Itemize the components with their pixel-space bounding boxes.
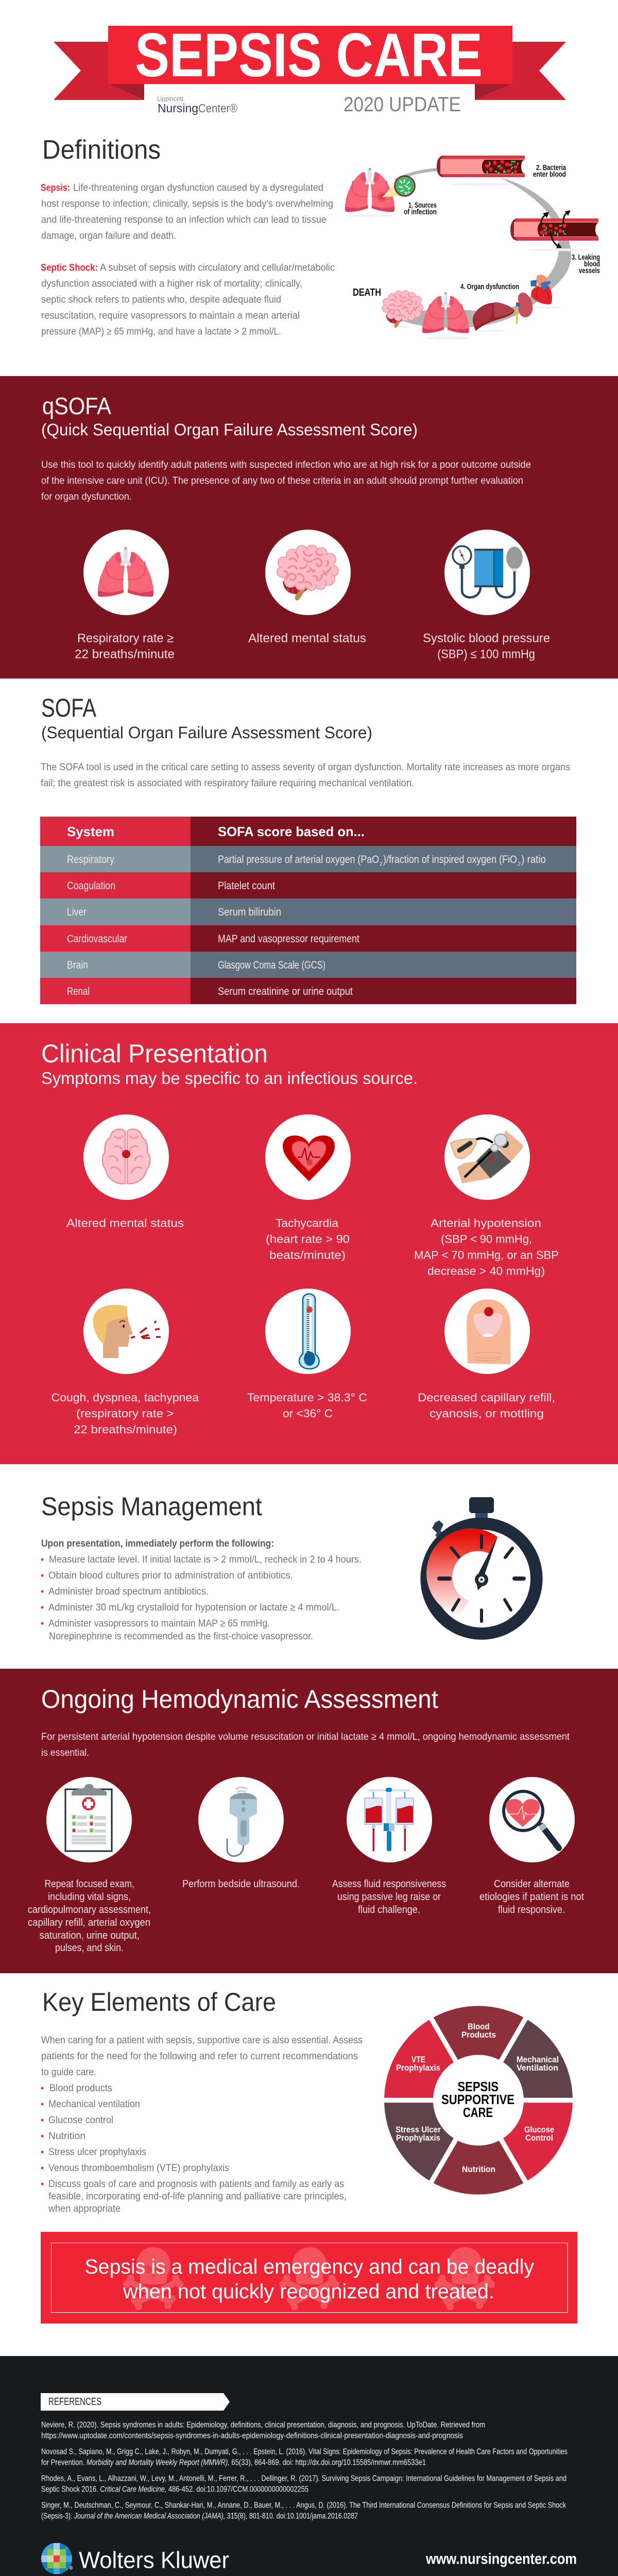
icon: blood pressure measurement	[444, 1114, 530, 1200]
caption: alternate etiologies: Consider alternate	[494, 1878, 570, 1890]
caption: arterial hypotension: Arterial hypotension	[431, 1217, 541, 1229]
logo: Wolters Kluwer: Wolters Kluwer	[79, 2547, 229, 2573]
text block: supportive care intro	[41, 2035, 363, 2078]
caption: alternate etiologies	[479, 1878, 584, 1916]
caption: repeat focused exam: saturation, urine output,	[39, 1930, 140, 1941]
list: care elements: Glucose control	[48, 2114, 113, 2126]
text block: septic shock definition: dysfunction associated with a higher risk of mortality; clinically,	[41, 278, 302, 290]
label: leaking blood vessels	[572, 253, 600, 275]
table: SOFA systems: MAP and vasopressor requirement	[218, 933, 359, 945]
icon: heart	[530, 275, 552, 304]
chart: sepsis supportive care wheel: VTE	[411, 2055, 425, 2064]
text block: sepsis definition: Sepsis:	[41, 182, 70, 194]
label: bacteria enter blood: enter blood	[533, 171, 566, 179]
caption: repeat focused exam: Repeat focused exam,	[44, 1878, 134, 1890]
icon: heart with pulse	[265, 1114, 351, 1200]
text block: qSOFA description: of the intensive care unit (ICU). The presence of any two of these criteria in an adult should prompt further evaluation	[41, 475, 523, 486]
icon: failing brain	[382, 291, 423, 328]
text block: septic shock definition: A subset of sepsis with circulatory and cellular/metabolic	[100, 262, 335, 273]
logo: Lippincott NursingCenter: Center®	[198, 101, 237, 115]
caption: arterial hypotension: decrease > 40 mmHg)	[427, 1264, 545, 1278]
table: SOFA systems: Coagulation	[67, 880, 115, 892]
chart: sepsis supportive care wheel: Blood	[468, 2022, 489, 2031]
text block: supportive care intro: to guide care.	[41, 2066, 96, 2078]
text block: qSOFA description: Use this tool to quickly identify adult patients with suspected infection who are at high risk for a poor outcome outside	[41, 459, 531, 470]
table: SOFA systems: Platelet count	[218, 880, 275, 892]
text block: supportive care intro: patients for the need for the following and refer to current recommendations	[41, 2050, 358, 2062]
icon: ultrasound probe	[198, 1777, 284, 1862]
panel: SOFA	[40, 693, 576, 1004]
text block: references	[41, 2420, 568, 2520]
list: care elements: Nutrition	[48, 2130, 85, 2142]
chart: sepsis supportive care wheel: Control	[525, 2133, 553, 2143]
chart: sepsis supportive care wheel: CARE	[463, 2105, 493, 2120]
table: SOFA systems: Liver	[67, 906, 87, 918]
list: immediate actions: Norepinephrine is recommended as the first-choice vasopressor.	[49, 1631, 313, 1642]
table: SOFA systems: Partial pressure of arterial oxygen (PaO	[218, 854, 379, 866]
chart: sepsis supportive care wheel: Stress Ulcer	[396, 2125, 441, 2134]
caption: tachycardia: (heart rate > 90	[266, 1232, 350, 1246]
subheading: symptoms: Symptoms may be specific to an infectious source.	[41, 1069, 418, 1088]
caption: temperature: or <36° C	[283, 1407, 333, 1420]
table: SOFA systems: 2	[518, 861, 521, 867]
diagram: progression of sepsis	[345, 156, 602, 340]
caption: fluid responsiveness: fluid challenge.	[358, 1904, 420, 1916]
label: leaking blood vessels: vessels	[579, 267, 600, 275]
caption: fluid responsiveness	[332, 1878, 446, 1916]
icon: kidney	[518, 293, 533, 317]
caption: respiratory rate: 22 breaths/minute	[75, 647, 175, 662]
heading: qSOFA: qSOFA	[42, 393, 111, 419]
caption: alternate etiologies: fluid responsive.	[498, 1904, 565, 1916]
text block: septic shock definition: Septic Shock:	[41, 262, 98, 273]
text block: qSOFA description: for organ dysfunction.	[41, 491, 132, 502]
caption: respiratory rate	[75, 632, 175, 662]
table: SOFA systems: Brain	[67, 959, 88, 971]
chart: sepsis supportive care wheel: Products	[461, 2030, 496, 2040]
icon: liver	[473, 302, 520, 331]
icon: skull watermarks	[123, 2247, 495, 2310]
chart: sepsis supportive care wheel: Glucose	[524, 2125, 554, 2134]
callout text: when not quickly recognized and treated.	[123, 2280, 494, 2303]
text block: SOFA description	[41, 761, 570, 789]
title: SEPSIS CARE	[135, 21, 483, 90]
icon: respiratory rate lungs	[83, 530, 169, 615]
label: bacteria enter blood	[533, 164, 566, 179]
text block: sepsis definition: host response to infection; clinically, sepsis is the body's overwhelming	[41, 198, 333, 209]
callout text: Sepsis is a medical emergency and can be deadly	[84, 2256, 534, 2278]
caption: bedside ultrasound: Perform bedside ultrasound.	[182, 1878, 300, 1890]
caption: systolic blood pressure	[423, 632, 550, 662]
text block: qSOFA description	[41, 459, 531, 502]
caption: arterial hypotension: (SBP < 90 mmHg,	[441, 1232, 532, 1246]
header banner	[54, 21, 566, 100]
panel: ongoing hemodynamic assessment	[0, 1669, 618, 1973]
chart: sepsis supportive care wheel: Prophylaxis	[396, 2133, 440, 2143]
website address: www.nursingcenter.com	[425, 2550, 577, 2568]
caption: arterial hypotension: MAP < 70 mmHg, or an SBP	[414, 1249, 559, 1261]
logo: Lippincott NursingCenter: Nursing	[158, 101, 198, 115]
label: leaking blood vessels: 3. Leaking	[572, 253, 600, 262]
middle blood vessel, leaking	[510, 218, 602, 241]
caption: temperature	[247, 1391, 367, 1420]
caption: altered mental status: Altered mental status	[248, 632, 366, 645]
list: immediate actions: Administer vasopressors to maintain MAP ≥ 65 mmHg.	[48, 1618, 270, 1629]
icon: failing lungs	[422, 292, 469, 333]
caption: altered mental status: Altered mental status	[66, 1217, 184, 1229]
callout: medical emergency	[41, 2232, 577, 2324]
caption: tachycardia: Tachycardia	[276, 1217, 339, 1229]
text block: sepsis definition	[41, 182, 333, 241]
text block: sepsis definition: damage, organ failure and death.	[41, 230, 176, 241]
panel: clinical presentation	[0, 1023, 618, 1464]
icon: stopwatch	[420, 1497, 543, 1640]
heading: SOFA: SOFA	[41, 693, 97, 722]
caption: tachycardia: beats/minute)	[269, 1249, 346, 1261]
text block: references: (Sepsis-3). Journal of the American Medical Association (JAMA), 315(8), 801-810. doi:10.1001/jama.2016.0287	[41, 2512, 358, 2520]
chart: sepsis supportive care wheel: Nutrition	[462, 2165, 495, 2174]
list: care elements: Blood products	[49, 2082, 112, 2094]
caption: capillary refill: Decreased capillary refill,	[418, 1391, 555, 1404]
list: immediate actions: Obtain blood cultures prior to administration of antibiotics.	[48, 1570, 293, 1581]
caption: fluid responsiveness: using passive leg raise or	[337, 1891, 441, 1903]
label: sources of infection: of infection	[404, 208, 437, 216]
table: SOFA systems	[40, 817, 576, 1004]
text block: hemodynamic intro: is essential.	[41, 1747, 89, 1758]
heading: Definitions: Definitions	[42, 135, 161, 165]
arrows: leakage from vessel	[541, 210, 571, 248]
arc pathway	[396, 170, 571, 328]
label: bacteria enter blood: 2. Bacteria	[536, 164, 566, 172]
caption: systolic blood pressure: (SBP) ≤ 100 mmHg	[437, 647, 535, 662]
heading: clinical presentation: Clinical Presentation	[41, 1039, 268, 1068]
subtitle: 2020 update: 2020 UPDATE	[344, 93, 461, 116]
table: SOFA systems: SOFA score based on...	[218, 824, 365, 839]
caption: arterial hypotension	[414, 1217, 559, 1278]
caption: temperature: Temperature > 38.3° C	[247, 1391, 367, 1404]
text block: SOFA description: The SOFA tool is used in the critical care setting to assess severity of organ dysfunction. Mortality rate increases as more organs	[41, 761, 570, 773]
caption: cough and dyspnea	[52, 1391, 199, 1436]
text block: septic shock definition: pressure (MAP) ≥ 65 mmHg, and have a lactate > 2 mmol/L.	[41, 326, 281, 337]
top blood vessel with bacteria	[437, 156, 527, 177]
table: SOFA systems: Serum creatinine or urine output	[218, 986, 353, 997]
text block: references: Neviere, R. (2020). Sepsis syndromes in adults: Epidemiology, definitions, clinical presentation, diagnosis, and prognosis. UpToDate. Retrieved from	[41, 2420, 485, 2430]
subheading: SOFA expanded: (Sequential Organ Failure Assessment Score)	[41, 723, 372, 742]
caption: respiratory rate: Respiratory rate ≥	[77, 632, 174, 645]
label: sources of infection	[404, 201, 437, 216]
heading: ongoing hemodynamic assessment: Ongoing Hemodynamic Assessment	[41, 1685, 438, 1714]
text block: management lead-in: Upon presentation, immediately perform the following:	[41, 1538, 274, 1549]
chart: sepsis supportive care wheel: Mechanical	[517, 2055, 559, 2064]
references tag	[41, 2393, 230, 2411]
table: SOFA systems: Serum bilirubin	[218, 906, 281, 918]
text block: references: https://www.uptodate.com/contents/sepsis-syndromes-in-adults-epidemiology-definitions-clinical-presentation-diagnosis-and-prognosis	[41, 2432, 463, 2440]
panel: qSOFA	[0, 376, 618, 679]
table: SOFA systems: )/fraction of inspired oxygen (FiO	[383, 854, 517, 866]
icon: clipboard	[46, 1777, 132, 1862]
table: SOFA systems: Cardiovascular	[67, 933, 127, 945]
list: immediate actions: Administer 30 mL/kg crystalloid for hypotension or lactate ≥ 4 mmol/L.	[48, 1602, 339, 1613]
heading: sepsis management: Sepsis Management	[41, 1492, 262, 1521]
callout text	[84, 2256, 534, 2303]
text block: sepsis definition: and life-threatening response to an infection which can lead to tissue	[41, 214, 327, 226]
icon: magnifying glass over heart	[489, 1777, 575, 1862]
label: sources of infection: 1. Sources	[408, 201, 437, 210]
list: care elements	[41, 2082, 347, 2214]
text block: supportive care intro: When caring for a patient with sepsis, supportive care is also essential. Assess	[41, 2035, 363, 2046]
logo: Wolters Kluwer	[41, 2543, 229, 2574]
text block: hemodynamic intro: For persistent arterial hypotension despite volume resuscitation or initial lactate ≥ 4 mmol/L, ongoing hemodynamic assessment	[41, 1731, 570, 1742]
caption: repeat focused exam: cardiopulmonary assessment,	[28, 1904, 151, 1916]
text block: references: Septic Shock 2016. Critical Care Medicine, 486-452. doi:10.1097/CCM.0000000000002255	[41, 2485, 308, 2494]
icon: blood pressure cuff	[444, 530, 530, 615]
caption: repeat focused exam	[28, 1878, 151, 1954]
caption: alternate etiologies: etiologies if patient is not	[479, 1891, 584, 1903]
icon: IV blood bags	[347, 1777, 432, 1862]
caption: capillary refill: cyanosis, or mottling	[430, 1407, 544, 1420]
list: care elements: feasible, incorporating end-of-life planning and palliative care principles,	[48, 2191, 347, 2202]
caption: tachycardia	[266, 1217, 350, 1261]
table: SOFA systems: ) ratio	[521, 854, 546, 866]
logo: Lippincott NursingCenter	[157, 95, 237, 115]
heading: key elements of care: Key Elements of Care	[42, 1988, 276, 2016]
icon: altered mental status brain	[265, 530, 351, 615]
table: SOFA systems: Respiratory	[67, 854, 114, 866]
list: immediate actions: Measure lactate level. If initial lactate is > 2 mmol/L, recheck in 2 to 4 hours.	[49, 1554, 362, 1565]
chart: sepsis supportive care wheel: Prophylaxis	[396, 2063, 440, 2073]
caption: fluid responsiveness: Assess fluid responsiveness	[332, 1878, 446, 1890]
text block: references: for Prevention. Morbidity and Mortality Weekly Report (MMWR), 65(33), 864-869. doi: http://dx.doi.org/10.15585/mmwr.mm6533e1	[41, 2459, 426, 2467]
panel: sepsis management	[41, 1492, 543, 1642]
text block: septic shock definition	[41, 262, 335, 337]
chart: sepsis supportive care wheel	[381, 2006, 576, 2195]
caption: systolic blood pressure: Systolic blood pressure	[423, 632, 550, 645]
subheading: qSOFA expanded: (Quick Sequential Organ Failure Assessment Score)	[41, 420, 418, 439]
label: death: DEATH	[353, 287, 381, 298]
table: SOFA systems: Renal	[67, 986, 90, 997]
list: care elements: Venous thromboembolism (VTE) prophylaxis	[48, 2162, 229, 2174]
icon: infected lungs	[345, 168, 415, 212]
table: SOFA systems: 2	[380, 861, 383, 867]
icon: coughing face	[83, 1289, 169, 1374]
text block: SOFA description: fail; the greatest risk is associated with respiratory failure requiring mechanical ventilation.	[41, 777, 414, 789]
icon: brain top view	[83, 1114, 169, 1200]
table: SOFA systems: Glasgow Coma Scale (GCS)	[218, 959, 325, 971]
caption: repeat focused exam: pulses, and skin.	[55, 1942, 124, 1954]
label: organ dysfunction: 4. Organ dysfunction	[460, 283, 519, 291]
list: care elements: Discuss goals of care and prognosis with patients and family as early as	[48, 2178, 344, 2190]
caption: cough and dyspnea: Cough, dyspnea, tachypnea	[52, 1391, 199, 1404]
text block: septic shock definition: septic shock refers to patients who, despite adequate fluid	[41, 294, 281, 305]
list: care elements: when appropriate	[48, 2203, 121, 2214]
logo: Lippincott NursingCenter: Lippincott	[157, 95, 183, 103]
list: immediate actions: Administer broad spectrum antibiotics.	[48, 1586, 209, 1597]
caption: capillary refill	[418, 1391, 555, 1420]
panel: footer	[0, 2356, 618, 2576]
chart: sepsis supportive care wheel: SEPSIS	[457, 2079, 499, 2094]
icon: thermometer	[265, 1289, 351, 1374]
list: care elements: Mechanical ventilation	[48, 2098, 140, 2110]
chart: sepsis supportive care wheel: Ventilation	[517, 2063, 558, 2073]
chart: sepsis supportive care wheel: SUPPORTIVE	[441, 2092, 514, 2107]
text block: septic shock definition: resuscitation, require vasopressors to maintain a mean arterial	[41, 310, 300, 321]
table: SOFA systems: System	[67, 824, 114, 839]
list: care elements: Stress ulcer prophylaxis	[48, 2146, 146, 2158]
panel: key elements of care	[41, 1988, 576, 2214]
shadows	[348, 183, 590, 340]
icon: fingernail	[444, 1289, 530, 1374]
caption: cough and dyspnea: (respiratory rate >	[76, 1407, 174, 1420]
list: immediate actions	[41, 1554, 362, 1642]
caption: repeat focused exam: including vital signs,	[48, 1891, 131, 1903]
references tag: REFERENCES	[48, 2396, 101, 2408]
text block: sepsis definition: Life-threatening organ dysfunction caused by a dysregulated	[73, 182, 323, 194]
caption: repeat focused exam: capillary refill, arterial oxygen	[28, 1917, 150, 1928]
caption: cough and dyspnea: 22 breaths/minute)	[74, 1423, 177, 1436]
text block: hemodynamic intro	[41, 1731, 570, 1758]
label: leaking blood vessels: blood	[584, 260, 600, 268]
